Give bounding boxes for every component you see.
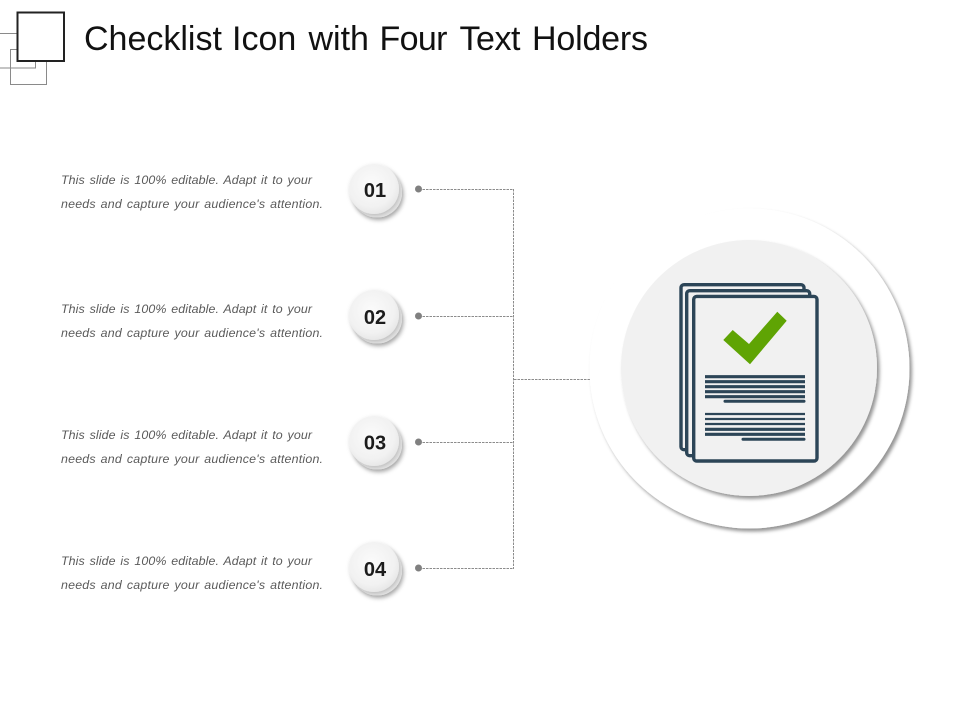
- number badge 03: 03: [364, 432, 386, 454]
- text block 01: needs and capture your audience's attention.: [61, 197, 323, 211]
- number badge 04: [349, 542, 402, 596]
- title: Four: [380, 20, 448, 58]
- text block 03: needs and capture your audience's attention.: [61, 452, 323, 466]
- connector dot 03: [415, 438, 422, 446]
- item 04: [61, 542, 422, 596]
- document text lines: [705, 377, 805, 439]
- item 03: [61, 416, 422, 470]
- title: Icon: [232, 20, 296, 58]
- connector lines: [419, 189, 590, 569]
- text block 04: needs and capture your audience's attention.: [61, 578, 323, 592]
- title: Text: [460, 20, 521, 58]
- text block 04: This slide is 100% editable. Adapt it to your: [61, 554, 313, 568]
- number badge 02: [349, 290, 402, 344]
- connector dot 04: [415, 564, 422, 572]
- icon: checklist document stack: [681, 285, 817, 461]
- title: Checklist: [84, 20, 222, 58]
- title: Holders: [532, 20, 648, 58]
- number badge 01: 01: [364, 180, 386, 202]
- decorative title squares icon: [0, 12, 64, 84]
- number badge 04: 04: [364, 559, 387, 581]
- title: [84, 20, 648, 58]
- title: with: [308, 20, 369, 58]
- text block 04: [61, 554, 323, 592]
- item 01: [61, 164, 422, 218]
- text block 01: This slide is 100% editable. Adapt it to your: [61, 173, 313, 187]
- text block 01: [61, 173, 323, 211]
- outer white circle: [590, 208, 910, 528]
- item 02: [61, 290, 422, 344]
- inner grey circle: [621, 240, 877, 496]
- text block 02: [61, 302, 323, 340]
- text block 03: This slide is 100% editable. Adapt it to your: [61, 428, 313, 442]
- text block 02: This slide is 100% editable. Adapt it to your: [61, 302, 313, 316]
- text block 02: needs and capture your audience's attention.: [61, 326, 323, 340]
- connector dot 01: [415, 186, 422, 192]
- text block 03: [61, 428, 323, 466]
- number badge 02: 02: [364, 307, 386, 329]
- number badge 01: [349, 164, 402, 218]
- number badge 03: [349, 416, 402, 470]
- connector dot 02: [415, 312, 422, 320]
- icon: green check mark: [723, 312, 787, 364]
